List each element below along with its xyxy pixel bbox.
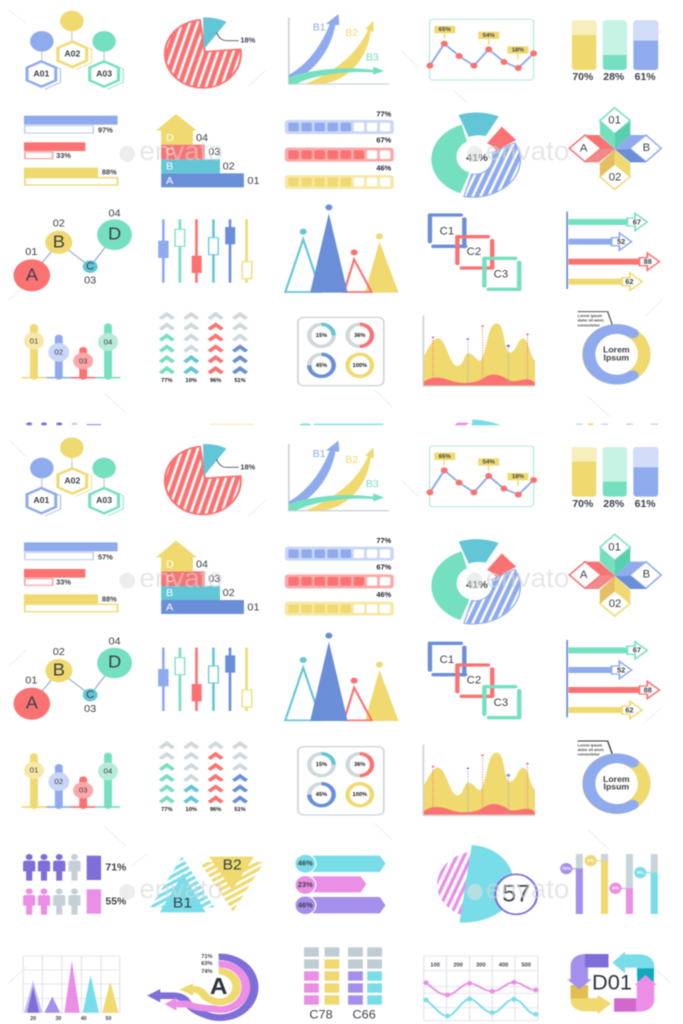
wave line chart: 500 — [521, 963, 531, 968]
linked squares C1 C2 C3: C3 — [494, 697, 508, 709]
watermark: envato row 3: envato — [486, 874, 569, 904]
growth arrows B1 B2 B3: B1 — [313, 449, 326, 460]
vertical pin bars: 8% — [612, 886, 620, 891]
four petal diamonds — [569, 108, 661, 189]
chevron columns: 96% — [210, 807, 221, 813]
linked squares C1 C2 C3 — [430, 215, 519, 289]
lorem ipsum donut: Lorem — [603, 774, 630, 784]
four petal diamonds: A — [580, 143, 588, 155]
grid triangle chart: 30 — [55, 1016, 61, 1022]
triangles B1 B2: B2 — [223, 857, 242, 873]
top rows: second copy — [24, 437, 661, 624]
wave line chart — [423, 956, 538, 1021]
vertical pin bars: 79% — [561, 866, 572, 871]
pin bars 01-04: 01 — [30, 766, 38, 775]
lorem ipsum donut: consectetur — [578, 753, 600, 757]
area chart — [423, 315, 535, 386]
row 3: second copy — [14, 633, 659, 721]
triangle peaks — [285, 204, 399, 293]
vertical pin bars: 9% — [637, 870, 645, 875]
vertical pin bars — [560, 854, 658, 914]
four petal diamonds: 01 — [608, 115, 621, 127]
staircase arrow: 01 — [247, 175, 260, 187]
staircase arrow: 03 — [208, 146, 220, 158]
chevron columns — [160, 743, 247, 813]
panel: four ring gauges: 100% — [353, 363, 367, 369]
pin bars 01-04: 03 — [79, 786, 88, 795]
chevron columns: 96% — [210, 378, 221, 384]
horizontal bars — [24, 542, 118, 612]
hexagon balloons A01 A02 A03 — [27, 11, 123, 89]
three level bars — [572, 447, 658, 510]
lorem ipsum donut: dolor sit amet, — [578, 319, 604, 323]
slider candles — [158, 219, 252, 283]
chevron columns: 51% — [234, 378, 246, 384]
progress segments: 46% — [376, 590, 392, 599]
line chart with tags — [426, 19, 537, 80]
percent label arrows: 46% — [298, 900, 313, 909]
arrow bar chart: 88 — [644, 257, 652, 266]
watermark: envato row 3 — [119, 874, 569, 904]
arrow bar chart: 52 — [617, 237, 625, 246]
linked squares C1 C2 C3: C2 — [467, 674, 481, 686]
growth arrows B1 B2 B3: B2 — [345, 28, 359, 39]
people percent chart: 71% — [105, 863, 126, 873]
staircase arrow: 03 — [208, 573, 220, 585]
percent label arrows: 23% — [298, 880, 313, 889]
half pie with 57 — [437, 845, 537, 923]
staircase arrow: D — [166, 132, 174, 144]
linked squares C1 C2 C3 — [430, 643, 519, 718]
panel: four ring gauges: 15% — [316, 762, 327, 768]
panel: four ring gauges — [298, 747, 384, 815]
horizontal bars: 57% — [98, 552, 113, 561]
lorem ipsum donut: consectetur — [578, 323, 600, 327]
clipped row fragment — [0, 419, 683, 428]
progress segments: 46% — [376, 163, 392, 172]
staircase arrow: 02 — [223, 587, 235, 599]
staircase arrow: B — [166, 160, 173, 172]
staircase arrow: D — [166, 559, 174, 571]
slider candles — [158, 648, 252, 711]
lorem ipsum donut: Ipsum — [604, 353, 630, 362]
linked squares C1 C2 C3: C1 — [440, 226, 454, 238]
concentric arc arrows A: 63% — [201, 961, 213, 967]
growth arrows B1 B2 B3: B1 — [313, 23, 326, 33]
chevron columns — [160, 314, 247, 384]
connected circles A B C D: 02 — [53, 218, 65, 230]
panel: four ring gauges: 36% — [354, 333, 366, 339]
growth arrows B1 B2 B3: B2 — [345, 455, 359, 466]
pie chart 18%: 18% — [240, 462, 256, 471]
line chart with tags: 18% — [512, 48, 525, 53]
staircase arrow: A — [166, 602, 174, 614]
block table C78 C66 — [304, 947, 382, 1021]
three level bars: 70% — [572, 499, 593, 510]
percent label arrows — [295, 854, 385, 915]
hexagon balloons A01 A02 A03: A03 — [96, 69, 112, 78]
block table C78 C66: C78 — [309, 1008, 333, 1021]
connected circles A B C D: C — [86, 689, 94, 701]
connected circles A B C D: D — [108, 224, 121, 243]
pie chart 18% — [165, 17, 256, 88]
watermark: envato row 2: envato — [139, 562, 223, 593]
horizontal bars: 33% — [56, 578, 72, 587]
concentric arc arrows A: 71% — [201, 954, 213, 960]
watermark: envato row 2: envato — [486, 562, 569, 593]
staircase arrow: 01 — [247, 602, 260, 614]
horizontal bars — [24, 116, 118, 185]
four petal diamonds: A — [580, 569, 588, 581]
wave line chart: 300 — [476, 963, 486, 968]
connected circles A B C D: D — [108, 652, 121, 672]
staircase arrow: 04 — [196, 132, 208, 144]
pin bars 01-04: 01 — [30, 336, 38, 345]
line chart with tags: 18% — [512, 474, 525, 480]
hexagon balloons A01 A02 A03: A02 — [64, 476, 81, 485]
connected circles A B C D: 02 — [53, 646, 65, 658]
connected circles A B C D: C — [86, 261, 94, 273]
three level bars: 70% — [572, 72, 593, 83]
three level bars: 61% — [635, 499, 656, 510]
connected circles A B C D — [14, 207, 132, 291]
connected circles A B C D: A — [26, 265, 38, 284]
rows 5 and 6 — [23, 845, 658, 1022]
block table C78 C66: C66 — [353, 1008, 376, 1021]
pin bars 01-04: 02 — [54, 777, 63, 786]
watermark: envato row 2 — [119, 562, 569, 593]
hexagon balloons A01 A02 A03 — [27, 437, 123, 516]
three level bars: 28% — [603, 499, 624, 510]
vertical pin bars: 5% — [587, 858, 595, 863]
wave line chart: 200 — [454, 963, 463, 968]
segmented donut 41% — [431, 112, 520, 197]
pin bars 01-04: 04 — [104, 767, 113, 776]
staircase arrow: C — [166, 146, 174, 158]
area chart — [423, 745, 535, 815]
lorem ipsum donut — [578, 741, 644, 809]
arrow bar chart — [567, 212, 659, 290]
segmented donut 41%: 41% — [466, 152, 488, 164]
row 4: second copy — [22, 741, 644, 815]
watermark: envato row 3: envato — [139, 874, 223, 904]
half pie with 57: 57 — [502, 881, 530, 907]
top rows: first copy — [24, 11, 661, 197]
pie chart 18%: 18% — [240, 36, 256, 45]
chevron columns: 10% — [186, 378, 197, 384]
progress segments — [285, 536, 394, 616]
staircase arrow — [156, 541, 260, 614]
four petal diamonds: 02 — [609, 171, 621, 183]
grid triangle chart — [23, 956, 120, 1022]
horizontal bars: 97% — [98, 126, 113, 135]
connected circles A B C D: 04 — [109, 207, 121, 219]
pie chart 18% — [165, 444, 256, 515]
triangles B1 B2 — [150, 857, 264, 912]
lorem ipsum donut: Ipsum — [604, 782, 630, 792]
horizontal bars: 88% — [102, 168, 117, 177]
connected circles A B C D: B — [53, 232, 65, 251]
connected circles A B C D: B — [53, 660, 65, 680]
line chart with tags: 65% — [439, 27, 452, 33]
linked squares C1 C2 C3: C3 — [494, 269, 508, 281]
hexagon balloons A01 A02 A03: A01 — [33, 495, 50, 505]
progress segments — [285, 109, 394, 189]
staircase arrow: 04 — [196, 559, 208, 571]
row 3: first copy — [14, 204, 659, 293]
triangle peaks — [285, 633, 399, 721]
staircase arrow: A — [166, 175, 174, 187]
lorem ipsum donut: Lorem ipsum — [578, 314, 603, 318]
staircase arrow: C — [166, 573, 174, 585]
line chart with tags: 65% — [439, 454, 452, 460]
staircase arrow: B — [166, 587, 173, 599]
staircase arrow: 02 — [223, 161, 235, 173]
progress segments: 77% — [376, 536, 392, 545]
chevron columns: 10% — [186, 807, 197, 813]
pin bars 01-04 — [22, 326, 120, 378]
pin bars 01-04 — [22, 756, 120, 807]
linked squares C1 C2 C3: C1 — [440, 654, 454, 666]
three level bars — [572, 20, 658, 83]
horizontal bars: 33% — [56, 151, 72, 160]
line chart with tags: 54% — [483, 460, 496, 465]
wave line chart: 400 — [499, 963, 508, 968]
line chart with tags: 54% — [483, 33, 496, 39]
connected circles A B C D: A — [26, 693, 38, 713]
concentric arc arrows A: A — [210, 973, 227, 1000]
pin bars 01-04: 03 — [79, 356, 88, 365]
connected circles A B C D: 03 — [84, 703, 96, 715]
wave line chart: 100 — [430, 963, 440, 968]
hexagon balloons A01 A02 A03: A03 — [96, 495, 112, 505]
chevron columns: 51% — [234, 807, 246, 813]
row 4: first copy — [22, 312, 644, 386]
arrow bar chart: 67 — [633, 646, 641, 655]
connected circles A B C D: 03 — [84, 275, 96, 287]
arrow bar chart — [567, 640, 659, 719]
four petal diamonds: 01 — [608, 541, 621, 553]
four petal diamonds: 02 — [609, 598, 621, 610]
lorem ipsum donut — [578, 312, 644, 380]
panel: four ring gauges: 15% — [316, 333, 327, 339]
grid triangle chart: 40 — [81, 1016, 87, 1022]
panel: four ring gauges: 100% — [353, 792, 367, 798]
panel: four ring gauges: 45% — [316, 363, 327, 369]
linked squares C1 C2 C3: C2 — [467, 246, 481, 258]
people percent chart — [23, 854, 126, 915]
panel: four ring gauges: 45% — [316, 792, 327, 798]
connected circles A B C D — [14, 636, 132, 720]
cycle arrows D01: D01 — [592, 971, 632, 994]
people percent chart: 55% — [105, 897, 126, 907]
growth arrows B1 B2 B3: B3 — [366, 479, 379, 490]
segmented donut 41%: 41% — [466, 579, 488, 591]
percent label arrows: 46% — [298, 859, 313, 868]
horizontal bars: 88% — [102, 594, 117, 603]
connected circles A B C D: 01 — [25, 674, 37, 686]
line chart with tags — [426, 446, 537, 507]
pin bars 01-04: 02 — [54, 348, 63, 357]
grid triangle chart: 20 — [30, 1016, 36, 1022]
arrow bar chart: 88 — [644, 685, 652, 694]
watermark: envato row 1: envato — [139, 136, 223, 166]
three level bars: 28% — [603, 72, 624, 83]
connected circles A B C D: 01 — [25, 246, 37, 258]
four petal diamonds: B — [643, 142, 650, 154]
lorem ipsum donut: dolor sit amet, — [578, 748, 604, 752]
segmented donut 41% — [431, 539, 520, 624]
arrow bar chart: 62 — [625, 277, 634, 286]
hexagon balloons A01 A02 A03: A01 — [33, 69, 50, 78]
hexagon balloons A01 A02 A03: A02 — [64, 49, 81, 59]
concentric arc arrows A: 74% — [201, 969, 213, 975]
grid triangle chart: 50 — [106, 1016, 112, 1022]
panel: four ring gauges — [298, 317, 384, 386]
progress segments: 77% — [376, 109, 392, 118]
arrow bar chart: 52 — [617, 665, 625, 674]
chevron columns: 77% — [161, 807, 173, 813]
four petal diamonds: B — [643, 569, 650, 581]
connected circles A B C D: 04 — [109, 636, 121, 648]
cycle arrows D01 — [567, 952, 657, 1014]
four petal diamonds — [569, 534, 661, 616]
growth arrows B1 B2 B3 — [289, 441, 389, 511]
concentric arc arrows A — [147, 954, 254, 1018]
growth arrows B1 B2 B3: B3 — [366, 53, 379, 63]
watermark: envato row 1: envato — [486, 136, 569, 166]
lorem ipsum donut: Lorem ipsum — [578, 743, 603, 747]
pin bars 01-04: 04 — [104, 337, 113, 346]
growth arrows B1 B2 B3 — [289, 14, 389, 84]
chevron columns: 77% — [161, 378, 173, 384]
arrow bar chart: 62 — [625, 705, 634, 714]
watermark: envato row 1 — [119, 136, 569, 166]
lorem ipsum donut: Lorem — [603, 345, 630, 355]
three level bars: 61% — [635, 72, 656, 83]
panel: four ring gauges: 36% — [354, 762, 366, 768]
staircase arrow — [156, 114, 260, 187]
arrow bar chart: 67 — [633, 217, 641, 226]
progress segments: 67% — [376, 136, 392, 145]
progress segments: 67% — [376, 562, 392, 571]
triangles B1 B2: B1 — [173, 895, 192, 911]
